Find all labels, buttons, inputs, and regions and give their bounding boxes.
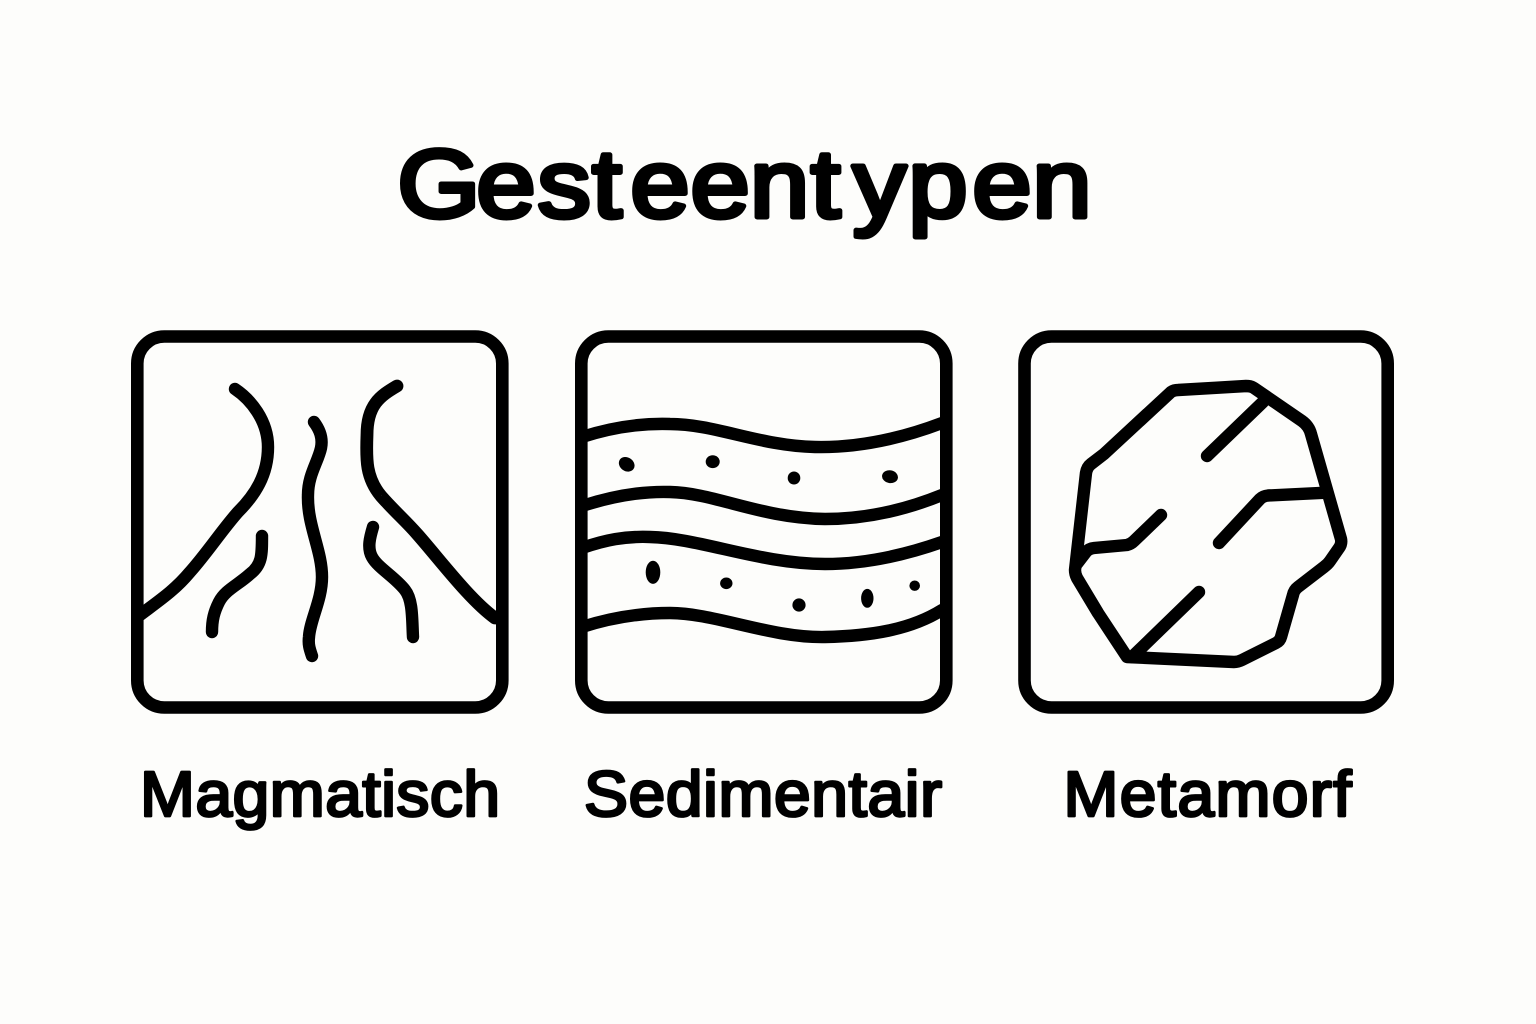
panel: metamorf icon xyxy=(1024,336,1388,708)
label: metamorf: Metamorf xyxy=(1063,758,1352,830)
label: sedimentair: Sedimentair xyxy=(584,758,942,830)
sediment grains xyxy=(616,454,920,612)
title: Gesteentypen xyxy=(397,129,1092,238)
panel: sedimentair icon xyxy=(581,336,946,708)
label: magmatisch: Magmatisch xyxy=(140,758,500,830)
panel: magmatisch icon xyxy=(137,336,502,708)
